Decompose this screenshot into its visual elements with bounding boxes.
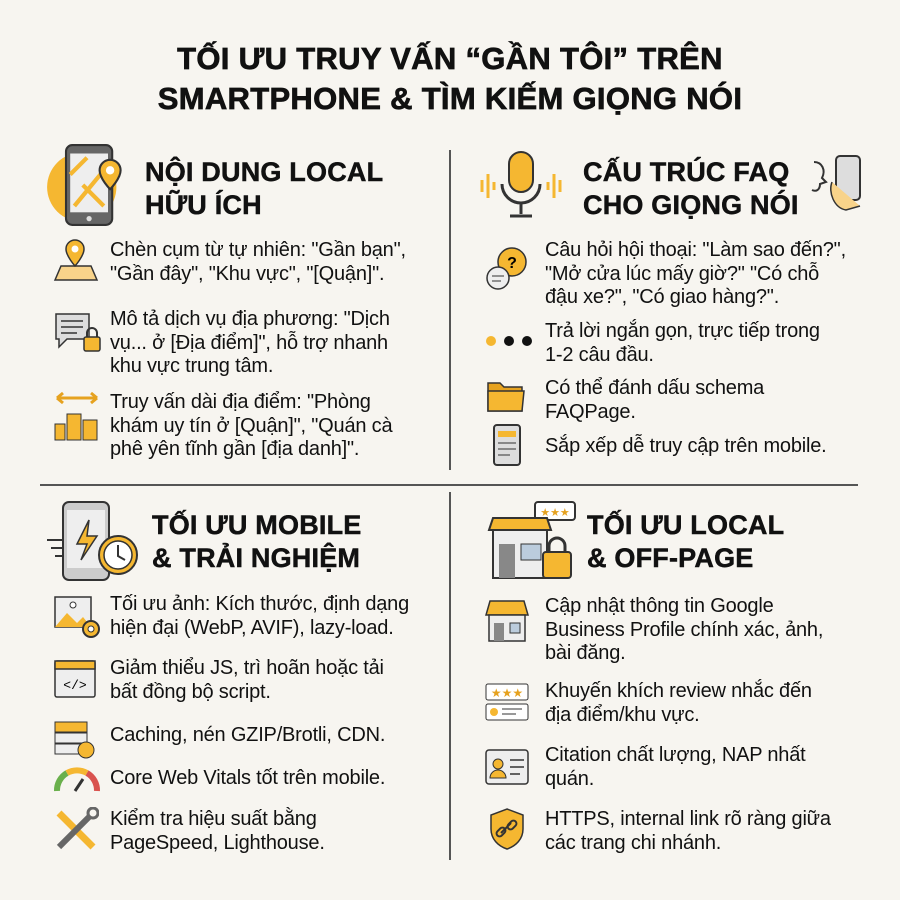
- item: conversational: đậu xe?", "Có giao hàng?".: [545, 286, 779, 308]
- item: short answers: Trả lời ngắn gọn, trực tiếp trong: [545, 320, 820, 342]
- item: local service: [55, 308, 390, 377]
- heading: TỐI ƯU LOCAL: [587, 510, 784, 540]
- item: mobile layout: Sắp xếp dễ truy cập trên mobile.: [545, 435, 827, 457]
- icon: phone lightning clock: [47, 501, 138, 581]
- item: citation: Citation chất lượng, NAP nhất: [545, 744, 805, 766]
- item: schema: FAQPage.: [545, 400, 636, 422]
- item: JS: bất đồng bộ script.: [110, 680, 271, 702]
- item: natural phrases: [54, 239, 406, 284]
- item: natural phrases: Chèn cụm từ tự nhiên: "Gần bạn",: [110, 239, 406, 261]
- item: long-tail: [54, 391, 393, 460]
- item: conversational: [486, 239, 846, 308]
- item: GBP: Cập nhật thông tin Google: [545, 595, 774, 617]
- item: reviews: [486, 679, 812, 726]
- item: caching: Caching, nén GZIP/Brotli, CDN.: [110, 724, 385, 746]
- item: reviews: địa điểm/khu vực.: [545, 704, 700, 726]
- heading: & TRẢI NGHIỆM: [152, 543, 360, 573]
- item: reviews: ★★★: [491, 686, 523, 700]
- item: conversational: ?: [507, 255, 517, 272]
- item: tools: PageSpeed, Lighthouse.: [110, 832, 325, 854]
- item: tools: [56, 807, 325, 854]
- heading: [145, 156, 383, 220]
- heading: CHO GIỌNG NÓI: [583, 190, 799, 220]
- item: GBP: bài đăng.: [545, 642, 626, 664]
- icon: store lock: [488, 501, 576, 579]
- item: GBP: [485, 595, 823, 664]
- item: JS: [54, 657, 384, 702]
- item: natural phrases: "Gần đây", "Khu vực", "[Quận]".: [110, 262, 384, 284]
- item: https: HTTPS, internal link rõ ràng giữa: [545, 808, 831, 830]
- heading: & OFF-PAGE: [587, 543, 754, 573]
- heading: TỐI ƯU MOBILE: [152, 510, 362, 540]
- item: mobile layout: [493, 424, 827, 466]
- item: images: hiện đại (WebP, AVIF), lazy-load.: [110, 616, 394, 638]
- icon: phone hand: [812, 155, 861, 211]
- item: local service: khu vực trung tâm.: [110, 355, 273, 377]
- item: long-tail: khám uy tín ở [Quận]", "Quán cà: [110, 414, 392, 436]
- icon: microphone: [480, 151, 562, 218]
- item: citation: quán.: [545, 768, 594, 790]
- item: caching: [54, 722, 385, 758]
- heading: [587, 510, 784, 573]
- panel: FAQ voice: [480, 151, 861, 466]
- item: short answers: [486, 319, 820, 366]
- item: tools: Kiểm tra hiệu suất bằng: [110, 808, 317, 830]
- item: short answers: 1-2 câu đầu.: [545, 344, 654, 366]
- item: images: [54, 593, 409, 638]
- item: https: [490, 808, 831, 854]
- heading: [583, 156, 799, 220]
- item: https: các trang chi nhánh.: [545, 832, 721, 854]
- title: SMARTPHONE & TÌM KIẾM GIỌNG NÓI: [158, 81, 742, 116]
- item: conversational: "Mở cửa lúc mấy giờ?" "Có chỗ: [545, 262, 819, 284]
- icon: store lock: ★★★: [540, 507, 570, 519]
- panel: local off-page: [485, 501, 831, 854]
- item: GBP: Business Profile chính xác, ảnh,: [545, 618, 823, 640]
- item: reviews: Khuyến khích review nhắc đến: [545, 680, 812, 702]
- heading: CẤU TRÚC FAQ: [583, 157, 789, 187]
- title: TỐI ƯU TRUY VẤN “GẦN TÔI” TRÊN: [177, 41, 723, 76]
- item: JS: </>: [63, 678, 87, 693]
- heading: HỮU ÍCH: [145, 190, 262, 220]
- item: schema: [487, 377, 764, 422]
- panel: local content: [47, 144, 406, 460]
- item: images: Tối ưu ảnh: Kích thước, định dạng: [110, 593, 409, 615]
- item: citation: [485, 744, 806, 790]
- item: long-tail: Truy vấn dài địa điểm: "Phòng: [110, 391, 371, 413]
- panel: mobile optimization: [47, 501, 409, 854]
- item: JS: Giảm thiểu JS, trì hoãn hoặc tải: [110, 657, 384, 679]
- heading: [152, 510, 362, 573]
- item: schema: Có thể đánh dấu schema: [545, 377, 764, 399]
- item: long-tail: phê yên tĩnh gần [địa danh]".: [110, 438, 359, 460]
- heading: NỘI DUNG LOCAL: [145, 157, 383, 187]
- title: [158, 41, 742, 116]
- item: local service: vụ... ở [Địa điểm]", hỗ trợ nhanh: [110, 332, 388, 354]
- item: conversational: Câu hỏi hội thoại: "Làm sao đến?",: [545, 239, 846, 261]
- item: local service: Mô tả dịch vụ địa phương: "Dịch: [110, 308, 390, 330]
- icon: phone map: [47, 144, 122, 226]
- item: core web vitals: Core Web Vitals tốt trên mobile.: [110, 767, 385, 789]
